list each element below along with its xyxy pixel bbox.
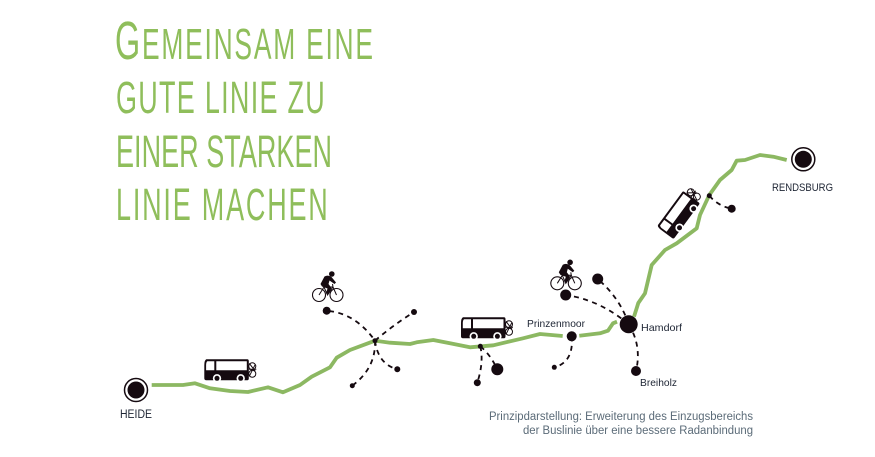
icon: cyclist, east <box>551 260 581 290</box>
caption: Prinzipdarstellung: Erweiterung des Einzugsbereichs <box>489 411 753 423</box>
label: Hamdorf: Hamdorf <box>641 322 682 334</box>
title: GEMEINSAM EINE <box>115 12 373 71</box>
title: LINIE MACHEN <box>116 179 328 230</box>
terminus: Rendsburg <box>792 148 815 171</box>
icon: bus with bike rack, centre <box>461 317 513 340</box>
label: Breiholz: Breiholz <box>640 377 677 389</box>
feeder cycle paths <box>329 196 732 386</box>
label: Heide: HEIDE <box>120 409 152 421</box>
icon: cyclist, west <box>312 271 343 302</box>
stops <box>323 193 736 388</box>
label: Rendsburg: RENDSBURG <box>772 182 833 194</box>
title: EINER STARKEN <box>116 126 332 177</box>
icon: bus with bike rack, west <box>204 359 256 382</box>
terminus: Heide <box>124 378 148 402</box>
icon: bus with bike rack, east <box>657 185 706 240</box>
title <box>115 12 373 230</box>
title: GUTE LINIE ZU <box>116 72 325 123</box>
caption: der Buslinie über eine bessere Radanbindung <box>523 425 753 437</box>
caption <box>489 411 753 437</box>
label: Prinzenmoor: Prinzenmoor <box>527 318 585 330</box>
bus line route <box>152 155 787 392</box>
